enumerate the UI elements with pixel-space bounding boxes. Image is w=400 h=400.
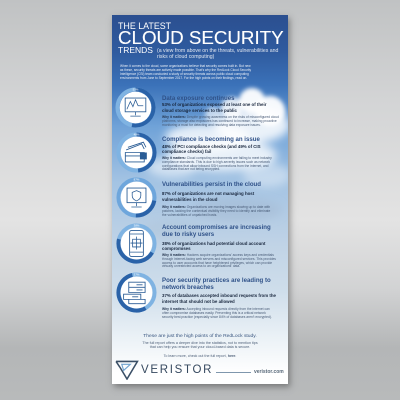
explanation: configurations that allow inbound SSH connections from the internet, and — [162, 164, 268, 168]
divider line — [216, 371, 251, 374]
icon: monitor ring — [116, 87, 156, 128]
panel: account compromises — [116, 223, 276, 268]
statistic: compromises — [162, 246, 191, 251]
statistic: internet that should not be allowed — [162, 299, 235, 304]
closing text — [142, 334, 258, 358]
heading: Account compromises are increasing — [162, 224, 271, 231]
statistic: cloud storage services to the public — [162, 108, 237, 113]
heading: network breaches — [162, 284, 214, 291]
statistic: 38% of organizations had potential cloud account — [162, 241, 265, 246]
closing heading: These are just the high points of the RedLock study. — [143, 334, 257, 339]
closing body: To learn more, check out the full report, here. — [164, 354, 236, 358]
heading: Data exposure continues — [162, 94, 234, 102]
icon: credit cards ring: 48% — [133, 132, 139, 136]
explanation: Why it matters: Cloud computing environments are failing to meet industry — [162, 156, 272, 160]
explanation: Why it matters: Organizations are moving images slowing up to date with — [162, 205, 270, 209]
intro text: Intelligence (CSI) team conducted a study of security threats across public cloud computing — [120, 72, 249, 76]
panel: data exposure — [116, 87, 279, 128]
title: THE LATEST — [118, 20, 171, 30]
explanation: Why it matters: Hackers acquire organizations' access keys and credentials — [162, 253, 274, 257]
closing body: that can help you ensure that your cloud-based data is secure. — [150, 345, 250, 349]
poster — [112, 15, 288, 384]
explanation: patches, lacking the contextual visibility they need to identify and eliminate — [162, 209, 270, 213]
explanation — [162, 307, 272, 319]
explanation: security best practice (especially since 84% of databases aren't encrypted). — [162, 315, 272, 319]
title — [118, 20, 284, 60]
icon: smartphone ring — [116, 223, 156, 264]
heading: Compliance is becoming an issue — [162, 136, 260, 143]
heading: Vulnerabilities persist in the cloud — [162, 181, 261, 188]
explanation: virtually unrestricted access to an organizations' data. — [162, 264, 240, 268]
closing body: The full report offers a deeper dive into the statistics, not to mention tips — [142, 341, 258, 345]
title: CLOUD SECURITY — [118, 27, 284, 48]
logo: Veristor — [116, 360, 284, 380]
explanation: often compromise databases easily. Preventing this is a critical network — [162, 311, 266, 315]
background clouds — [145, 84, 288, 218]
explanation: databases that are not being encrypted. — [162, 167, 220, 171]
intro text: environments from June to September 2017. For the high points on their findings, read on. — [120, 76, 247, 80]
heading: due to risky users — [162, 231, 214, 238]
icon: monitor ring: 53% — [132, 87, 138, 91]
panel: network breaches — [116, 272, 276, 319]
explanation: the vulnerabilities of unpatched hosts. — [162, 213, 217, 217]
explanation: Why it matters: Despite growing awareness on the risks of misconfigured cloud — [162, 115, 279, 119]
explanation: access to user accounts that have heightened privileges, which can provide — [162, 261, 272, 265]
website: veristor.com — [254, 369, 284, 375]
intro text — [120, 64, 252, 80]
intro text: When it comes to the cloud, some organizations believe that security comes built in. But new — [120, 64, 251, 68]
panel: compliance — [116, 132, 272, 172]
statistic: 37% of databases accepted inbound requests from the — [162, 293, 276, 298]
statistic — [162, 241, 266, 251]
panel: vulnerabilities — [116, 177, 270, 218]
icon: shield monitor ring — [116, 177, 156, 218]
icon: V mark — [116, 360, 139, 380]
explanation — [162, 253, 276, 268]
explanation: platforms, storage also exposures has continued to increase, making proactive — [162, 119, 277, 123]
heading — [162, 277, 271, 291]
icon: smartphone ring: 38% — [133, 223, 139, 227]
statistic: vulnerabilities in the cloud — [162, 197, 217, 202]
explanation: through internet-facing web servers and misconfigured services. This provides — [162, 257, 276, 261]
statistic — [162, 191, 254, 202]
title: (a view from above on the threats, vulnerabilities and — [157, 48, 278, 54]
statistic — [162, 102, 266, 113]
icon: server ring: 37% — [133, 272, 139, 276]
explanation: compliance standards. This is due to high-severity issues such as network — [162, 160, 270, 164]
explanation — [162, 205, 270, 217]
title: TRENDS — [118, 45, 153, 55]
statistic — [162, 293, 276, 304]
closing body — [142, 341, 258, 358]
explanation — [162, 115, 279, 127]
statistic: 48% of PCI compliance checks (and 49% of CIS — [162, 144, 261, 149]
icon: server ring — [116, 272, 156, 313]
heading: Poor security practices are leading to — [162, 277, 271, 284]
statistic: compliance checks) fail — [162, 149, 211, 154]
icon: shield monitor ring: 87% — [133, 177, 139, 181]
statistic: 53% of organizations exposed at least one of their — [162, 102, 266, 107]
heading — [162, 224, 271, 238]
explanation: monitoring a must for detecting and resolving data exposure issues. — [162, 123, 261, 127]
explanation — [162, 156, 272, 171]
wordmark: VERISTOR — [141, 364, 213, 376]
explanation: Why it matters: Accepting inbound requests directly from the internet can — [162, 307, 270, 311]
intro text: as these, security threats are actively made possible. That's why the RedLock Cloud Security — [120, 68, 251, 72]
statistic — [162, 144, 261, 154]
icon: credit cards ring — [116, 132, 156, 172]
title: risks of cloud computing) — [157, 54, 214, 60]
statistic: 87% of organizations are not managing host — [162, 191, 254, 196]
